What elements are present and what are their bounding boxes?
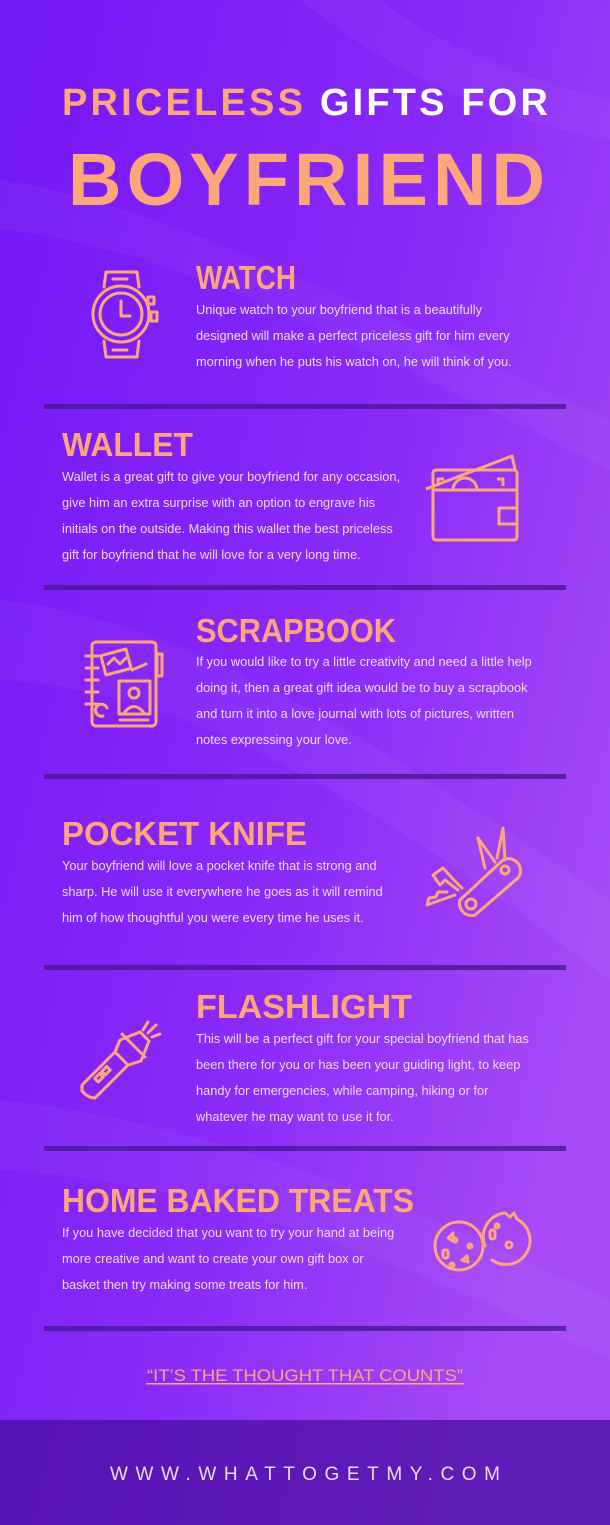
text: scrapbook: notes expressing your love. bbox=[196, 732, 352, 747]
text: flashlight: This will be a perfect gift for your special boyfriend that has bbox=[196, 1031, 529, 1046]
text: wallet: give him an extra surprise with an option to engrave his bbox=[62, 495, 375, 510]
text: scrapbook: doing it, then a great gift idea would be to buy a scrapbook bbox=[196, 680, 528, 695]
icon: pocket knife bbox=[427, 828, 521, 916]
heading: pocket knife: POCKET KNIFE bbox=[62, 815, 307, 853]
text: pocket knife: sharp. He will use it everywhere he goes as it will remind bbox=[62, 884, 383, 899]
text: wallet: Wallet is a great gift to give your boyfriend for any occasion, bbox=[62, 469, 400, 484]
icon: cookies bbox=[435, 1213, 530, 1270]
title: PRICELESS GIFTS FOR bbox=[62, 82, 548, 124]
text: home baked treats: If you have decided that you want to try your hand at being bbox=[62, 1225, 394, 1240]
text: pocket knife: Your boyfriend will love a pocket knife that is strong and bbox=[62, 858, 377, 873]
text: flashlight: been there for you or has been your guiding light, to keep bbox=[196, 1057, 520, 1072]
text: home baked treats: basket then try making some treats for him. bbox=[62, 1277, 307, 1292]
text: watch: Unique watch to your boyfriend that is a beautifully bbox=[196, 302, 483, 317]
text: watch: designed will make a perfect priceless gift for him every bbox=[196, 328, 510, 343]
footer band: WWW.WHATTOGETMY.COM bbox=[110, 1464, 500, 1485]
icon: wallet bbox=[426, 456, 517, 540]
title bbox=[62, 82, 548, 221]
icon: watch bbox=[93, 272, 157, 357]
title: BOYFRIEND bbox=[68, 138, 545, 221]
footer band bbox=[0, 1420, 610, 1525]
text: home baked treats: more creative and want to create your own gift box or bbox=[62, 1251, 364, 1266]
heading: scrapbook: SCRAPBOOK bbox=[196, 612, 397, 650]
text: wallet: initials on the outside. Making this wallet the best priceless bbox=[62, 521, 393, 536]
heading: flashlight: FLASHLIGHT bbox=[196, 988, 412, 1026]
icon: flashlight bbox=[82, 1022, 160, 1098]
text: watch: morning when he puts his watch on, he will think of you. bbox=[196, 354, 512, 369]
text: flashlight: whatever he may want to use it for. bbox=[195, 1109, 394, 1124]
text: scrapbook: If you would like to try a little creativity and need a little help bbox=[196, 654, 532, 669]
heading: home baked treats: HOME BAKED TREATS bbox=[62, 1182, 414, 1220]
icon: scrapbook bbox=[86, 642, 162, 726]
heading: watch: WATCH bbox=[196, 259, 296, 297]
quote: “IT’S THE THOUGHT THAT COUNTS” bbox=[147, 1366, 463, 1385]
text: wallet: gift for boyfriend that he will love for a very long time. bbox=[62, 547, 361, 562]
text: flashlight: handy for emergencies, while camping, hiking or for bbox=[196, 1083, 489, 1098]
text: pocket knife: him of how thoughtful you were every time he uses it. bbox=[62, 910, 364, 925]
heading: wallet: WALLET bbox=[62, 426, 193, 464]
text: scrapbook: and turn it into a love journal with lots of pictures, written bbox=[196, 706, 514, 721]
